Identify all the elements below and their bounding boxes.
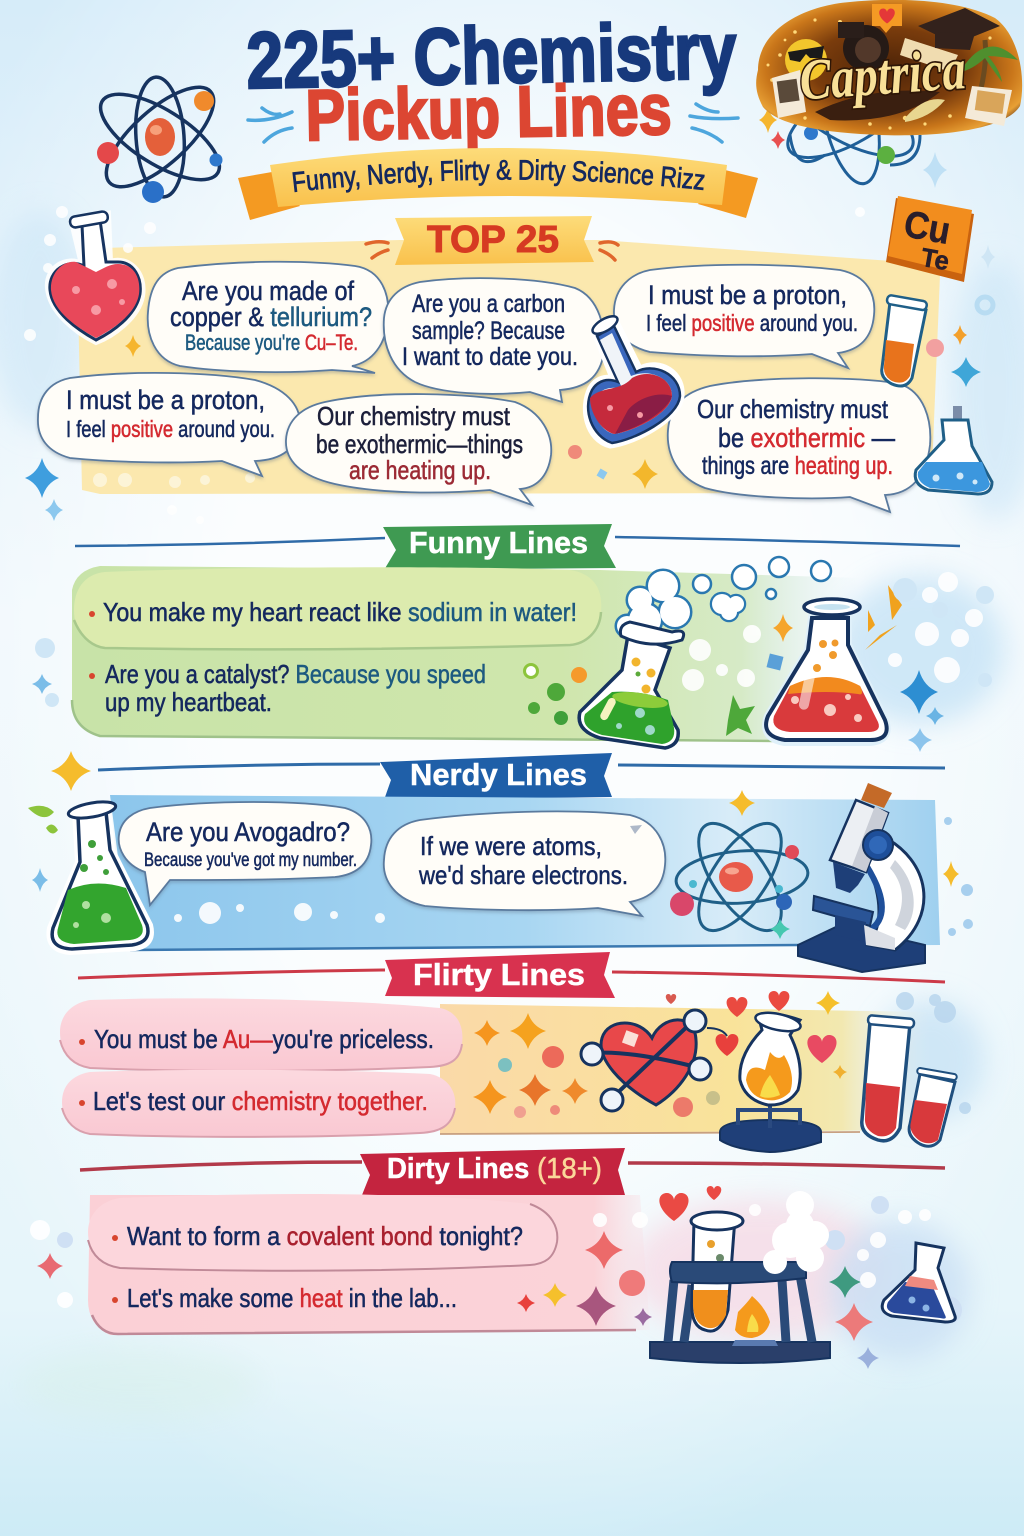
speech bubble 6: Our chemistry must [697,394,889,424]
icon: burner with flame flask [720,1009,821,1152]
speech bubble 6: things are heating up. [702,452,893,480]
pill: dirty line 1 [88,1194,557,1271]
speech bubble 4: I must be a proton, [66,385,265,415]
nerdy bubble 1: Are you Avogadro? [146,817,350,847]
icon: heart molecule [581,991,847,1111]
icon: heart flask left [48,211,143,357]
icon: element tile Cu Te [886,196,974,282]
speech bubble 1: Are you made of [182,276,354,306]
icon: atom nerdy [630,790,973,943]
speech bubble 4: I feel positive around you. [66,416,275,442]
funny line 2 [89,659,486,717]
speech bubble 5: are heating up. [349,455,491,485]
pill: funny line 1: You make my heart react like sodium in water! [103,597,577,627]
speech bubble 3: I must be a proton, [648,280,847,310]
heading: funny lines [75,524,960,570]
logo: Captrica [756,0,1022,135]
speech bubble 1: copper & tellurium? [170,302,372,332]
speech bubble 2: I want to date you. [402,343,578,371]
decorations around top 25 [24,206,995,524]
title line: Pickup Lines: Pickup Lines [305,70,672,156]
icon: microscope [798,783,925,972]
nerdy bubble 2: If we were atoms, [420,831,602,861]
icon: red flask [766,599,887,742]
panel: top 25 [78,240,940,494]
pill: flirty line 2 [62,1070,455,1137]
funny decorations [32,572,994,752]
heading: top 25 [366,216,618,265]
icon: heart flask centre [585,313,682,446]
funny line 2: up my heartbeat. [105,687,272,717]
title flourishes [248,104,738,142]
panel: nerdy lines [110,795,940,950]
icon: element tile Cu Te: Cu [901,204,953,253]
nerdy bubble 1 [119,802,371,905]
icon: atom right behind logo [759,41,947,189]
pill: flirty line 2: Let's test our chemistry together. [93,1086,428,1116]
speech bubble 6: be exothermic — [718,423,895,453]
flirty sparkles [473,1013,720,1118]
title line: 225+ Chemistry: 225+ Chemistry [246,6,738,105]
subtitle ribbon [238,148,758,220]
icon: tripod with tube and flame [650,1191,830,1363]
panel: flirty lines [60,998,930,1137]
heading: flirty lines: Flirty Lines [413,957,585,992]
icon: element tile Cu Te: Te [919,242,952,276]
subtitle text: Funny, Nerdy, Flirty & Dirty Science Rizz [292,159,705,193]
icon: atom left [88,71,232,203]
heading: nerdy lines [98,753,945,800]
heading: flirty lines [78,952,945,998]
pill: flirty line 1: You must be Au—you're priceless. [94,1024,434,1054]
title [246,6,738,156]
nerdy bubble 1: Because you've got my number. [144,850,357,871]
speech bubble 5 [286,394,551,505]
speech bubble 2 [384,278,604,402]
heading: dirty lines [80,1148,945,1195]
icon: red test tubes [862,992,971,1146]
dirty line 2: Let's make some heat in the lab... [127,1283,457,1313]
speech bubble 2: Are you a carbon [412,290,565,318]
speech bubble 1 [148,262,388,373]
pill: flirty line 1 [60,998,462,1071]
heading: nerdy lines: Nerdy Lines [410,757,587,792]
pill: funny line 1 [74,567,601,649]
speech bubble 2: sample? Because [412,317,565,345]
heading: top 25: TOP 25 [427,219,559,261]
icon: blue flask [915,406,992,494]
nerdy decorations [174,902,385,924]
nerdy bubble 2 [384,811,665,916]
dirty decorations [30,1186,962,1369]
speech bubble 6 [668,378,930,512]
logo: Captrica: Captrica [798,36,968,113]
nerdy bubble 2: we'd share electrons. [418,860,628,890]
speech bubble 5: be exothermic—things [316,429,523,459]
speech bubble 1: Because you're Cu–Te. [185,330,358,355]
panel: dirty lines [88,1194,650,1335]
speech bubble 4 [38,373,300,476]
icon: orange test tube [882,295,927,386]
panel: funny lines [72,566,860,741]
speech bubble 5: Our chemistry must [317,401,511,431]
icon: blue flask dirty [882,1243,955,1322]
icon: green flask with foam [579,557,831,748]
pill: dirty line 1: Want to form a covalent bond tonight? [127,1221,523,1251]
sparkles in the yellow panel [93,473,255,488]
heading: dirty lines: Dirty Lines (18+) [387,1153,602,1185]
heading: funny lines: Funny Lines [409,525,588,560]
funny line 2: Are you a catalyst? Because you speed [105,659,486,689]
speech bubble 3 [614,265,874,368]
icon: green flask nerdy [28,751,151,952]
speech bubble 3: I feel positive around you. [646,310,858,336]
